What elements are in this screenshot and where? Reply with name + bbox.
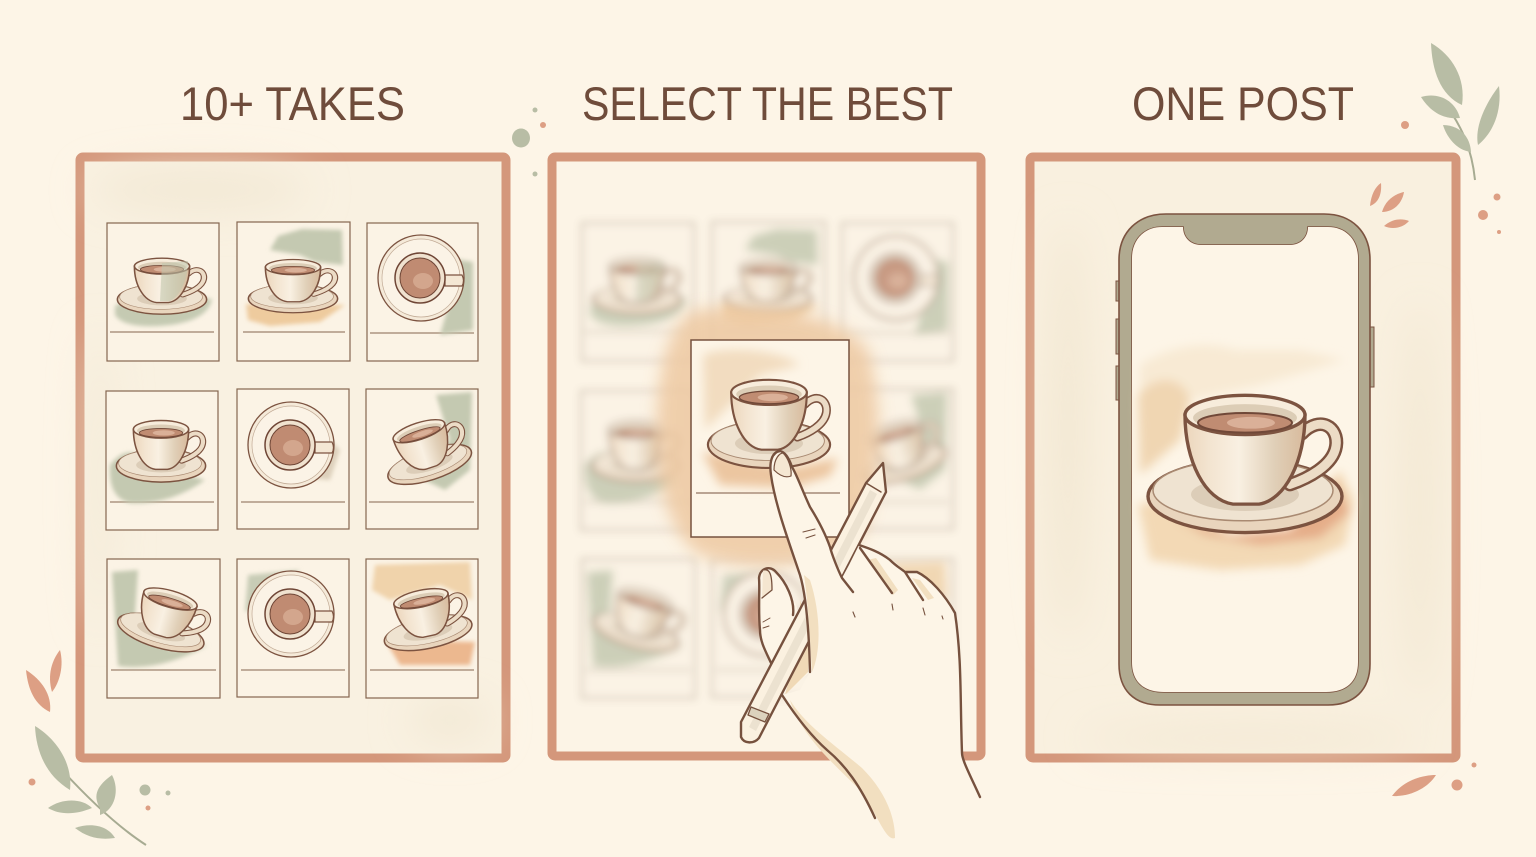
grid of nine cup photos — [106, 222, 478, 698]
hand outline — [770, 451, 980, 818]
blurred rejected photos — [581, 222, 953, 698]
selected cup — [708, 380, 830, 468]
decoration: bottom-right orange leaf — [1392, 775, 1436, 796]
side buttons — [1116, 281, 1374, 400]
panel: 10+ takes — [80, 157, 506, 758]
phone body — [1119, 214, 1370, 705]
hand shadows — [790, 558, 934, 838]
fingernail — [774, 453, 791, 477]
decoration: top-right leaves — [1421, 43, 1500, 180]
panel: one post — [1030, 157, 1456, 758]
watercolour wash — [1138, 345, 1354, 570]
knuckle creases — [803, 529, 943, 619]
decoration: dots — [28, 108, 1501, 810]
title: one post: ONE POST — [1132, 77, 1354, 130]
title: 10+ takes: 10+ TAKES — [180, 77, 405, 130]
paper texture blotches — [90, 170, 490, 740]
stylus — [741, 463, 886, 742]
thumb — [759, 568, 810, 695]
watercolour wash — [702, 350, 838, 488]
decoration: bottom-left leaves — [35, 726, 146, 845]
panel frame — [552, 157, 981, 756]
selected photo card — [691, 340, 849, 537]
panel frame — [1030, 157, 1456, 758]
panel frame — [80, 157, 506, 758]
hand and index finger fill — [770, 451, 985, 857]
hand holding stylus — [741, 451, 985, 857]
phone — [1116, 214, 1374, 705]
phone screen — [1132, 227, 1358, 692]
decoration: small orange leaves bottom-left — [26, 650, 62, 712]
title: select the best: SELECT THE BEST — [582, 77, 953, 130]
cup on screen — [1148, 395, 1342, 533]
orange highlight glow — [656, 307, 878, 565]
decoration: orange accent dashes — [1370, 183, 1409, 228]
panel: select the best — [552, 157, 981, 756]
paper texture blotches — [1052, 220, 1434, 748]
